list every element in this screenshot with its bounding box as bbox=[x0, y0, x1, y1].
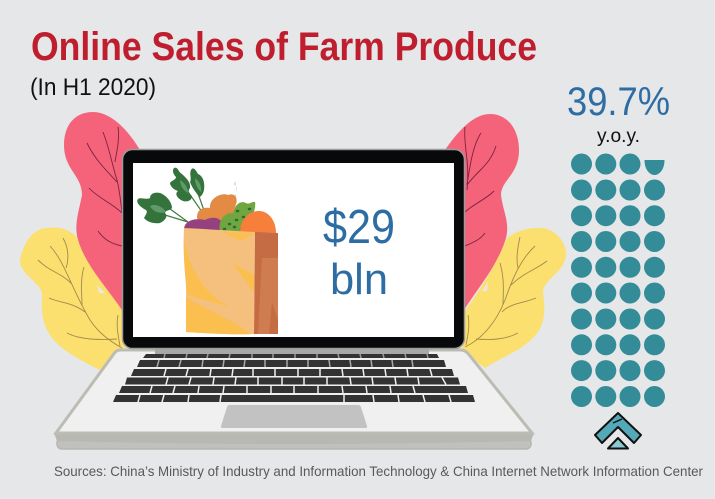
subtitle: (In H1 2020) bbox=[30, 74, 156, 101]
icon: beetroot bbox=[184, 218, 222, 233]
icon: leafy greens bbox=[137, 168, 207, 223]
right pink leaf bbox=[445, 114, 519, 310]
left yellow leaf bbox=[20, 227, 125, 370]
icon: wrapped chicken bbox=[197, 181, 237, 222]
icon: paper bag bbox=[184, 228, 278, 334]
year-on-year label: y.o.y. bbox=[597, 126, 640, 147]
sales unit: bln bbox=[330, 255, 388, 304]
illustration: grocery bag with vegetables bbox=[137, 168, 278, 334]
keyboard bbox=[113, 354, 475, 402]
laptop lower shell bbox=[54, 433, 534, 449]
laptop bbox=[54, 150, 534, 449]
sales figure: $29 bbox=[323, 201, 395, 254]
screen bezel bbox=[122, 150, 464, 348]
trackpad bbox=[221, 405, 367, 428]
dot matrix chart bbox=[571, 154, 665, 407]
laptop keyboard deck bbox=[56, 350, 532, 433]
icon: broccoli bbox=[219, 202, 255, 232]
title: Online Sales of Farm Produce bbox=[31, 25, 537, 69]
left pink leaf bbox=[64, 112, 140, 312]
icon: publisher logo chevron bbox=[595, 413, 641, 448]
right yellow leaf bbox=[462, 228, 566, 368]
hinge strip bbox=[155, 349, 429, 354]
icon: orange bbox=[240, 211, 276, 233]
decorative leaves behind laptop bbox=[20, 112, 566, 370]
screen bbox=[133, 163, 454, 337]
year-on-year percentage: 39.7% bbox=[567, 80, 670, 124]
